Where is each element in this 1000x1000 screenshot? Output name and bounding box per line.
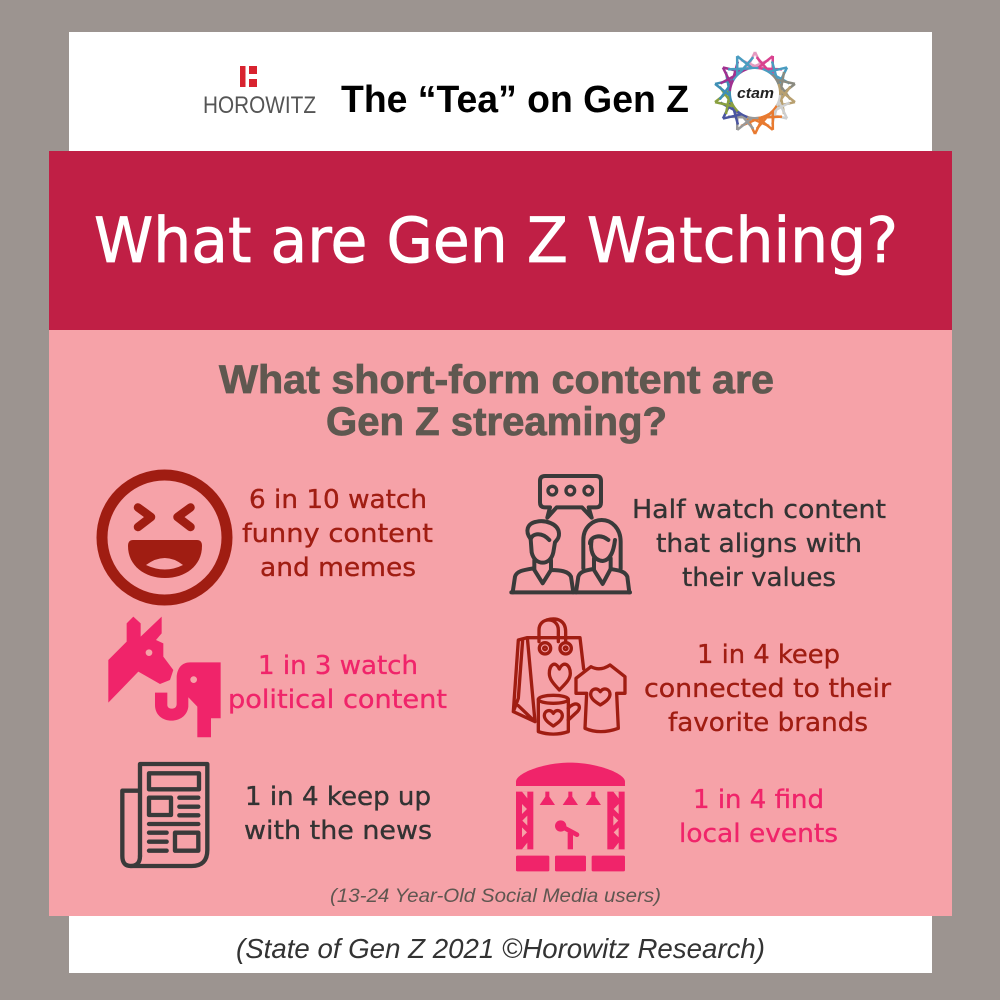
text: news content: with the news	[244, 816, 432, 846]
text: news content: 1 in 4 keep up	[245, 782, 431, 812]
logo: Horowitz	[203, 66, 316, 119]
text: funny content	[242, 485, 433, 583]
subheading	[219, 358, 774, 444]
icon: laughing face	[102, 475, 227, 600]
title: The “Tea” on Gen Z	[341, 79, 689, 121]
text: values content: that aligns with	[656, 529, 862, 559]
heading: What are Gen Z Watching?	[94, 204, 898, 277]
icon: shopping bag, mug and t-shirt	[513, 619, 625, 734]
logo: ctam ring	[712, 50, 798, 136]
text: funny content: 6 in 10 watch	[249, 485, 427, 515]
panel: pink content	[49, 330, 952, 916]
text: brands content: connected to their	[644, 674, 892, 704]
text: political content: 1 in 3 watch	[258, 651, 418, 681]
text: political content: political content	[228, 685, 447, 715]
panel: red banner	[49, 151, 952, 330]
icon: event stage	[516, 763, 625, 871]
text: local events content	[679, 785, 838, 849]
text: brands content	[644, 640, 892, 738]
icon: two people with speech bubble	[511, 476, 630, 592]
subheading: Gen Z streaming?	[326, 400, 667, 444]
text: local events content: 1 in 4 find	[693, 785, 824, 815]
text: brands content: 1 in 4 keep	[697, 640, 840, 670]
text: local events content: local events	[679, 819, 838, 849]
text: values content	[632, 495, 886, 593]
logo: Horowitz: HOROWITZ	[203, 92, 316, 119]
text: political content	[228, 651, 447, 715]
logo: ctam ring: ctam	[737, 85, 774, 102]
icon: newspaper	[122, 764, 207, 866]
text: values content: Half watch content	[632, 495, 886, 525]
text: news content	[244, 782, 432, 846]
text: funny content: and memes	[260, 553, 416, 583]
subheading: What short-form content are	[219, 358, 774, 402]
text: brands content: favorite brands	[668, 708, 868, 738]
icon: donkey and elephant	[108, 617, 221, 737]
source line: (State of Gen Z 2021 ©Horowitz Research)	[236, 933, 765, 964]
text: funny content: funny content	[242, 519, 433, 549]
text: values content: their values	[682, 563, 836, 593]
note: respondents: (13-24 Year-Old Social Media users)	[330, 885, 661, 907]
